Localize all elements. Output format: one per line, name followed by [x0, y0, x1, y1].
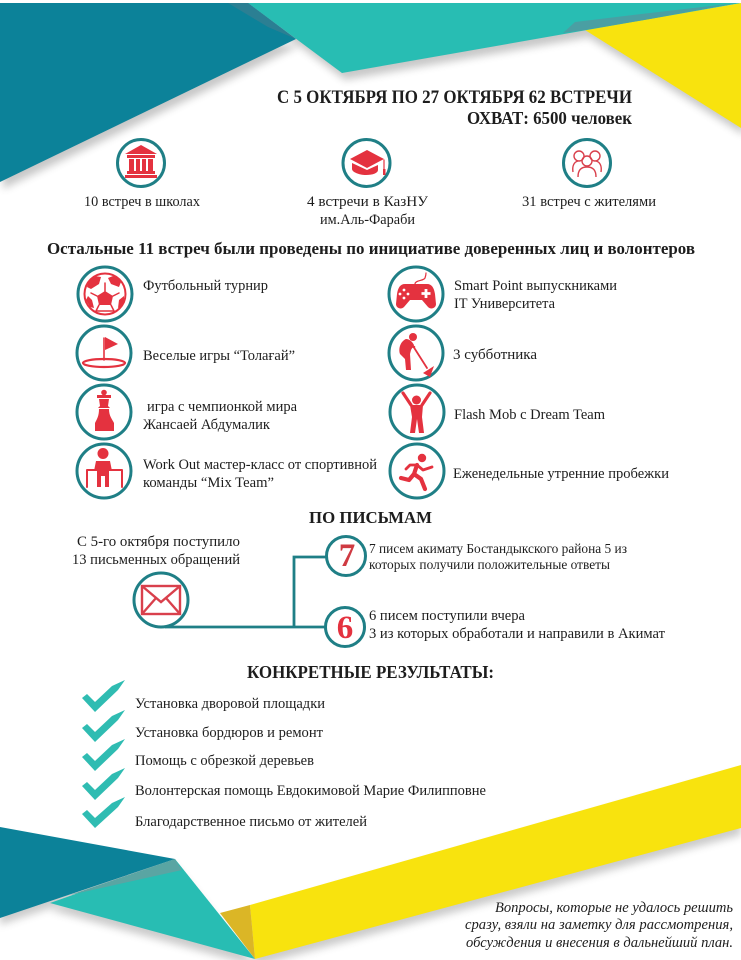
activity: running [390, 444, 669, 498]
icon: runner [401, 454, 432, 489]
icon: envelope [134, 573, 188, 627]
stat: residents [522, 140, 656, 210]
title: ОХВАТ: 6500 человек [467, 108, 633, 128]
activity: flash mob: Flash Mob с Dream Team [454, 407, 606, 423]
activity: flash mob [390, 385, 606, 439]
activity: fun games [77, 326, 295, 380]
footer note [465, 900, 733, 951]
result item 1: Установка дворовой площадки [135, 696, 325, 712]
result item 3 [82, 739, 314, 771]
activity: cleanup [389, 326, 538, 380]
result item 1 [82, 680, 325, 712]
activity: smart point: Smart Point выпускниками [454, 278, 617, 294]
callout: 6 letters [326, 608, 666, 646]
result item 2 [82, 710, 324, 742]
callout: 7 letters: которых получили положительные ответы [369, 558, 611, 573]
top decorative banner [0, 3, 741, 189]
activity: chess [77, 385, 298, 439]
stat: university: 4 встречи в КазНУ [307, 194, 429, 210]
letters intro text: 13 письменных обращений [72, 552, 240, 568]
activity: workout: команды “Mix Team” [143, 475, 274, 491]
activity: workout [77, 444, 377, 498]
activity: football: Футбольный турнир [143, 278, 268, 294]
footer note: Вопросы, которые не удалось решить [495, 900, 733, 916]
stat: university [307, 140, 429, 228]
callout: 6 letters: 6 [337, 610, 353, 646]
stat: schools: 10 встреч в школах [84, 194, 201, 210]
icon: group of people [573, 151, 601, 177]
footer note: обсуждения и внесения в дальнейший план. [466, 935, 733, 951]
result item 4: Волонтерская помощь Евдокимовой Марие Филипповне [135, 783, 486, 799]
connector lines [165, 557, 326, 627]
heading: letters: ПО ПИСЬМАМ [309, 508, 432, 527]
icon: person with raised arms [403, 393, 430, 433]
letters intro text [72, 534, 240, 568]
icon: school building [125, 145, 157, 178]
result item 5 [82, 797, 367, 830]
result item 2: Установка бордюров и ремонт [135, 725, 324, 741]
activity: chess: Жансаей Абдумалик [143, 417, 271, 433]
subheading: Остальные 11 встреч были проведены по инициативе доверенных лиц и волонтеров [47, 239, 695, 258]
icon: chess queen [95, 390, 114, 431]
stat: schools [84, 140, 201, 210]
activity: workout: Work Out мастер-класс от спортивной [143, 457, 377, 473]
callout: 7 letters: 7 писем акимату Бостандыкского района 5 из [369, 542, 627, 557]
heading: results: КОНКРЕТНЫЕ РЕЗУЛЬТАТЫ: [247, 662, 494, 682]
icon: person on parallel bars [87, 448, 122, 487]
icon: person sweeping [399, 333, 434, 377]
result item 4 [82, 768, 486, 800]
result item 3: Помощь с обрезкой деревьев [135, 753, 314, 769]
activity: cleanup: 3 субботника [453, 347, 538, 363]
activity: fun games: Веселые игры “Толағай” [143, 348, 295, 364]
callout: 7 letters [326, 536, 627, 576]
activity: football [78, 267, 268, 321]
title [277, 87, 633, 128]
letters intro text: С 5-го октября поступило [77, 534, 240, 550]
bottom decorative banner [0, 765, 741, 960]
activity: smart point [389, 267, 617, 321]
icon: game controller [396, 273, 436, 308]
callout: 6 letters: 6 писем поступили вчера [369, 608, 526, 624]
stat: university: им.Аль-Фараби [320, 212, 415, 228]
icon: soccer ball [84, 274, 126, 314]
activity: smart point: IT Университета [454, 296, 556, 312]
activity: running: Еженедельные утренние пробежки [453, 466, 669, 482]
callout: 6 letters: 3 из которых обработали и направили в Акимат [369, 626, 666, 642]
title: С 5 ОКТЯБРЯ ПО 27 ОКТЯБРЯ 62 ВСТРЕЧИ [277, 87, 632, 108]
icon: flag on ring [83, 337, 125, 367]
icon: graduation cap [350, 150, 386, 175]
result item 5: Благодарственное письмо от жителей [135, 814, 367, 830]
results checklist [82, 680, 486, 830]
callout: 7 letters: 7 [339, 538, 355, 574]
stat: residents: 31 встреч с жителями [522, 194, 656, 210]
activity: chess: игра с чемпионкой мира [147, 399, 298, 415]
footer note: сразу, взяли на заметку для рассмотрения, [465, 917, 733, 933]
